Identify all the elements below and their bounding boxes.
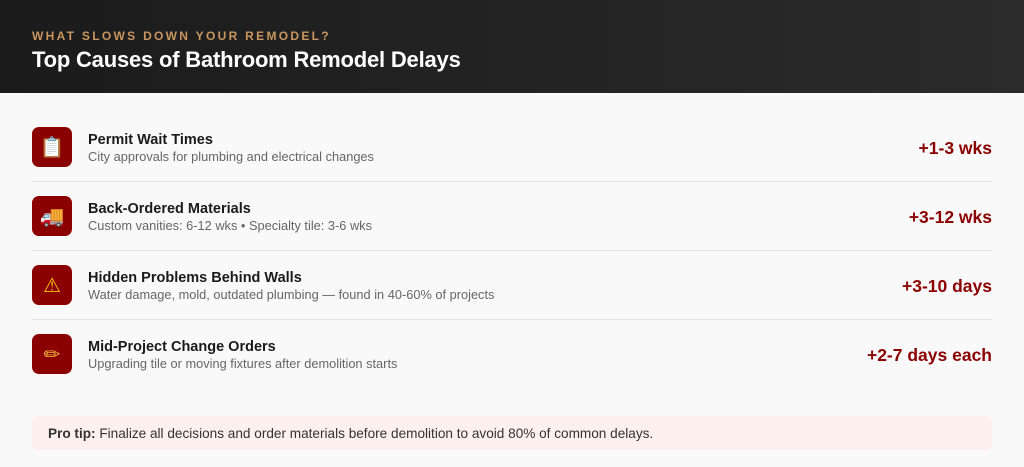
row: materials: +3-12 wks	[909, 207, 992, 227]
icon: truck: 🚚	[40, 204, 64, 228]
icon: warning	[32, 265, 72, 305]
row: hidden problems: Water damage, mold, outdated plumbing — found in 40-60% of projects	[88, 287, 494, 302]
header	[0, 0, 1024, 93]
icon: pencil	[32, 334, 72, 374]
row: change orders: Mid-Project Change Orders	[88, 339, 276, 355]
row: materials: Back-Ordered Materials	[88, 201, 251, 217]
row: change orders: Upgrading tile or moving fixtures after demolition starts	[88, 356, 397, 371]
row: permit	[32, 127, 992, 167]
row: materials: Custom vanities: 6-12 wks • Specialty tile: 3-6 wks	[88, 218, 372, 233]
icon: pencil: ✏	[44, 342, 60, 366]
row: hidden problems: Hidden Problems Behind Walls	[88, 270, 302, 286]
row: permit: +1-3 wks	[919, 138, 992, 158]
row: permit: City approvals for plumbing and electrical changes	[88, 149, 374, 164]
kicker: WHAT SLOWS DOWN YOUR REMODEL?	[32, 29, 331, 43]
pro tip callout	[32, 416, 992, 450]
icon: warning: ⚠	[43, 273, 61, 297]
title: Top Causes of Bathroom Remodel Delays	[32, 47, 461, 72]
row: hidden problems	[32, 265, 992, 305]
row: hidden problems: +3-10 days	[902, 276, 992, 296]
row: materials	[32, 196, 992, 236]
icon: clipboard: 📋	[40, 135, 64, 159]
icon: truck	[32, 196, 72, 236]
row: change orders	[32, 334, 992, 374]
pro tip callout: Pro tip: Finalize all decisions and order materials before demolition to avoid 80% of common delays.	[48, 426, 653, 441]
row: change orders: +2-7 days each	[867, 345, 992, 365]
icon: clipboard	[32, 127, 72, 167]
row: permit: Permit Wait Times	[88, 132, 213, 148]
